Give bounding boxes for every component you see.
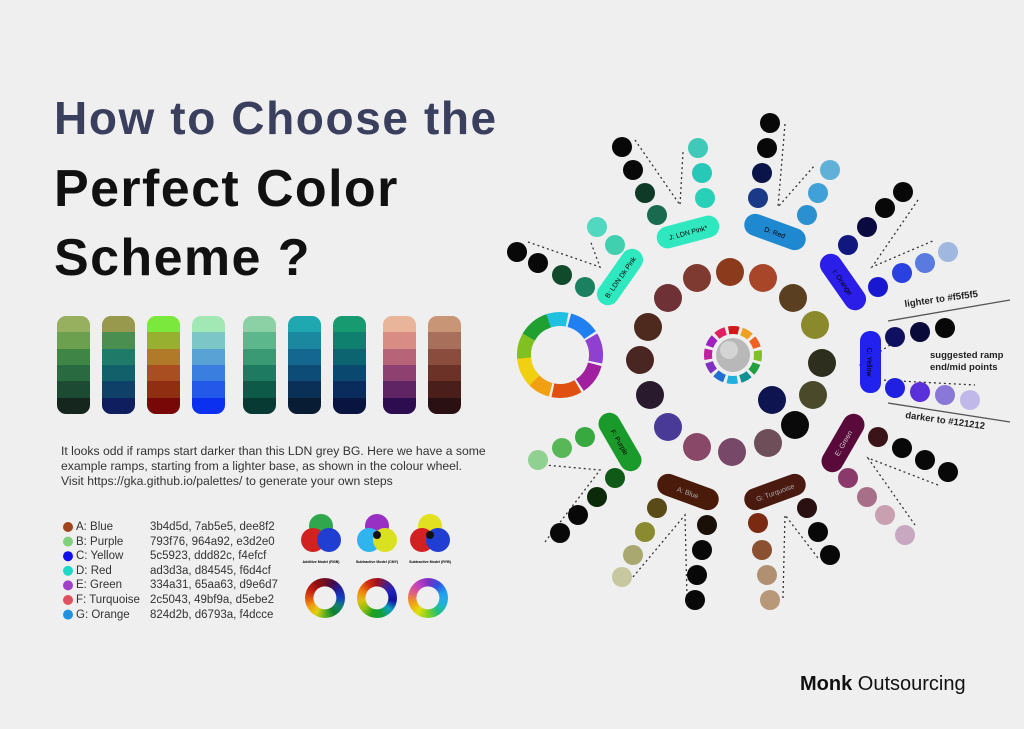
arm I Orange: I: Orange xyxy=(831,269,853,297)
legend: 334a31, 65aa63, d9e6d7 xyxy=(150,579,278,591)
left arrow ring xyxy=(509,304,611,406)
center mini wheel xyxy=(698,320,768,390)
arm B LDN Dk Pink xyxy=(507,217,647,310)
brand logo: Monk Outsourcing xyxy=(800,673,966,695)
legend: G: Orange xyxy=(76,609,130,621)
legend: 793f76, 964a92, e3d2e0 xyxy=(150,536,275,548)
legend: ad3d3a, d84545, f6d4cf xyxy=(150,565,271,577)
arm A Blue: A: Blue xyxy=(676,486,699,501)
legend: B: Purple xyxy=(76,536,123,548)
inner ring of colors xyxy=(626,258,836,466)
legend: 3b4d5d, 7ab5e5, dee8f2 xyxy=(150,521,275,533)
arm C Yellow xyxy=(860,318,980,410)
annotations: end/mid points xyxy=(930,362,998,373)
legend: C: Yellow xyxy=(76,550,123,562)
description text: example ramps, starting from a lighter base, as shown in the colour wheel. xyxy=(61,459,462,473)
description text: It looks odd if ramps start darker than this LDN grey BG. Here we have a some xyxy=(61,444,486,458)
color wheel diagram xyxy=(507,113,1010,610)
legend: 2c5043, 49bf9a, d5ebe2 xyxy=(150,594,274,606)
arm D Red xyxy=(741,113,840,253)
color ramps xyxy=(57,316,461,414)
title: Perfect Color xyxy=(54,160,399,218)
arm C Yellow: C: Yellow xyxy=(865,348,872,377)
annotations xyxy=(904,289,1004,432)
dotted guide lines xyxy=(528,124,975,598)
title: How to Choose the xyxy=(54,92,498,144)
legend: F: Turquoise xyxy=(76,594,140,606)
arm E Green: E: Green xyxy=(834,430,854,458)
legend: D: Red xyxy=(76,565,112,577)
title: Scheme ? xyxy=(54,229,311,287)
arm I Orange xyxy=(816,182,958,315)
arm J LDN Pink xyxy=(612,137,722,251)
arm G Turquoise: G: Turquoise xyxy=(755,483,796,504)
color model diagrams: Subtractive Model (RYB) xyxy=(409,560,452,564)
arm A Blue xyxy=(612,471,722,610)
color model diagrams: Subtractive Model (CMY) xyxy=(356,560,399,564)
arm E Green xyxy=(817,410,958,545)
description text xyxy=(61,444,486,488)
annotations: darker to #121212 xyxy=(905,410,986,432)
annotations: suggested ramp xyxy=(930,350,1004,361)
legend: E: Green xyxy=(76,579,122,591)
color model diagrams: Additive Model (RGB) xyxy=(303,560,340,564)
color model diagrams xyxy=(301,514,452,618)
arm F Purple: F: Purple xyxy=(609,429,629,457)
legend xyxy=(63,521,278,621)
legend: 824d2b, d6793a, f4dcce xyxy=(150,609,273,621)
arm G Turquoise xyxy=(741,471,840,610)
title xyxy=(54,92,498,287)
annotations: lighter to #f5f5f5 xyxy=(904,289,979,310)
arm F Purple xyxy=(528,409,646,543)
arm J LDN Pink: J: LDN Pink* xyxy=(668,225,709,242)
legend: A: Blue xyxy=(76,521,113,533)
legend: 5c5923, ddd82c, f4efcf xyxy=(150,550,266,562)
arm B LDN Dk Pink: B: LDN Dk Pink xyxy=(604,256,638,300)
description text: Visit https://gka.github.io/palettes/ to generate your own steps xyxy=(61,474,393,488)
arm D Red: D: Red xyxy=(763,226,786,240)
